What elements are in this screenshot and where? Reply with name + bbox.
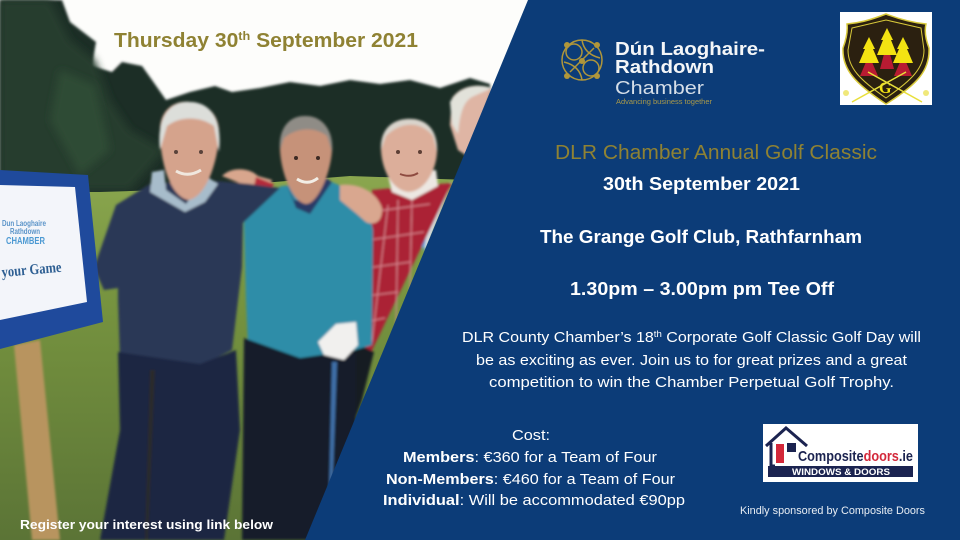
event title: DLR Chamber Annual Golf Classic [555,142,877,164]
event details: The Grange Golf Club, Rathfarnham [540,227,862,247]
icon: celtic knot [562,40,602,80]
golfer centre: teal sweater [242,116,373,540]
date heading: September 2021 [250,30,418,52]
event details: 1.30pm – 3.00pm pm Tee Off [570,279,835,299]
cost list: Cost: [512,427,550,444]
description paragraph: th [654,329,662,339]
logo: Dun Laoghaire-Rathdown Chamber: Advancing business together [616,99,713,106]
description paragraph [462,329,921,391]
icon: house [766,428,807,466]
logo: Dun Laoghaire-Rathdown Chamber: Chamber [615,78,704,98]
sign board: Dun Laoghaire [2,219,46,228]
photo: four golfers on the course [0,0,540,540]
event details: 30th September 2021 [603,174,800,194]
cost list: Individual : Will be accommodated €90pp [383,492,685,509]
golfer left: navy sweater [94,102,280,540]
cost list: Members : €360 for a Team of Four [403,449,657,466]
golfer far right: blue jacket [420,86,492,252]
logo: The Grange Golf Club crest [840,12,932,105]
sponsor caption: Kindly sponsored by Composite Doors [740,505,925,517]
logo: The Grange Golf Club crest: G [879,80,892,97]
description paragraph: competition to win the Chamber Perpetual Golf Trophy. [489,374,894,391]
tree line [0,0,490,195]
diagonal blue panel [305,0,960,540]
description paragraph: DLR County Chamber’s 18 [462,329,642,346]
sign board [0,170,103,349]
golfer right: red argyle sweater [355,119,452,420]
sign board: CHAMBER [6,236,46,247]
sign post [14,340,60,540]
sponsor logo: Composite Doors: Compositedoors.ie [798,448,913,465]
logo: Dun Laoghaire-Rathdown Chamber: Dún Laoghaire- [615,39,765,59]
sponsor logo: Composite Doors: WINDOWS & DOORS [792,467,890,477]
date heading: th [238,29,250,43]
description paragraph: Corporate Golf Classic Golf Day will [662,329,921,346]
logo: Dun Laoghaire-Rathdown Chamber: Rathdown [615,57,714,77]
logo: Dun Laoghaire-Rathdown Chamber [562,39,765,106]
cost list [383,427,685,509]
forearm around centre golfer [340,185,382,223]
sign board: your Game [1,260,62,281]
description paragraph: be as exciting as ever. Join us to for great prizes and a great [476,352,908,369]
event details [540,174,862,299]
fairway [0,176,470,540]
sponsor logo: Composite Doors [763,424,918,482]
faces [174,150,422,182]
red sleeve and hand of left golfer's arm [222,169,272,188]
sign board: Rathdown [10,227,40,236]
date heading: Thursday 30 [114,30,232,52]
golf glove [318,322,358,360]
date heading [114,29,418,52]
cost list: Non-Members : €460 for a Team of Four [386,471,675,488]
registration note: Register your interest using link below [20,517,274,532]
